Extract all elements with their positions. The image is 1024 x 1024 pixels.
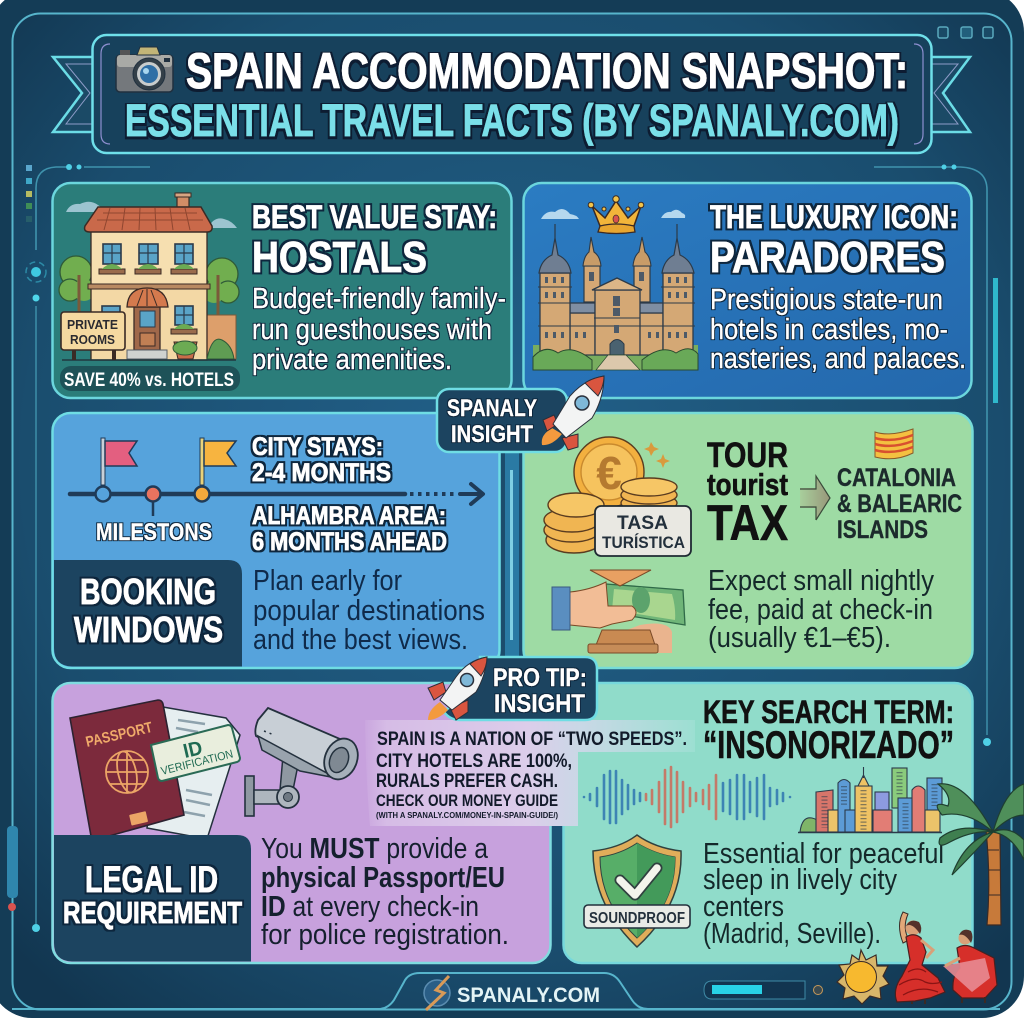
panel: legal id [52, 683, 550, 963]
text: description legal: for police registration. [261, 919, 509, 951]
divider stripe [501, 413, 523, 668]
heading: best value stay: BEST VALUE STAY: [252, 199, 497, 235]
callout: two speeds: SPAIN IS A NATION OF “TWO SPEEDS”. [377, 729, 687, 750]
panel: booking windows [52, 413, 500, 668]
icon: euro coins: € [596, 447, 622, 499]
text: search term description [703, 838, 944, 950]
icon: flamenco dancers [895, 912, 997, 1004]
text: search term description: centers [703, 891, 784, 923]
label: tasa turistica: TASA [617, 513, 668, 534]
heading: legal id requirement: REQUIREMENT [63, 895, 242, 930]
heading: legal id requirement: LEGAL ID [85, 859, 218, 900]
callout: two speeds: CHECK OUR MONEY GUIDE [376, 791, 558, 810]
heading: key search term: KEY SEARCH TERM: [703, 694, 954, 730]
text: paradores description: Prestigious state-run [710, 284, 943, 316]
sign: private rooms [61, 312, 125, 360]
sign: private rooms: ROOMS [70, 332, 115, 347]
timeline: MILESTONS [96, 519, 212, 546]
panel: paradores [524, 183, 972, 398]
icon: passport and papers [70, 700, 240, 840]
text: hostals description [252, 283, 506, 376]
icon: soundproof shield [584, 835, 690, 947]
icon: hostal building [59, 193, 239, 360]
text: paradores description [710, 284, 966, 375]
window control squares [938, 27, 993, 38]
icon: city skyline [798, 767, 942, 832]
icon: sound wave [584, 767, 790, 827]
heading: tour tourist tax: tourist [707, 467, 788, 502]
icon: sun [837, 950, 889, 1004]
text: tax description: fee, paid at check-in [708, 594, 933, 626]
badge: pro tip insight: INSIGHT [494, 690, 585, 718]
heading: tour tourist tax: TOUR [707, 436, 788, 475]
text: booking windows description [253, 565, 485, 656]
heading: tour tourist tax: TAX [707, 495, 788, 551]
panel: hostals [52, 183, 512, 398]
icon: euro coins [544, 437, 677, 553]
text: booking windows facts [252, 433, 447, 556]
text: search term description: Essential for peaceful [703, 838, 944, 870]
badge: pro tip insight [428, 657, 597, 720]
sign: private rooms: PRIVATE [67, 317, 118, 332]
heading: tour tourist tax [707, 436, 788, 551]
label: soundproof: SOUNDPROOF [589, 910, 685, 927]
heading: the luxury icon: PARADORES [710, 233, 945, 282]
icon: passport and papers: PASSPORT [84, 719, 154, 751]
text: description legal: physical Passport/EU [261, 862, 505, 894]
badge: spanaly insight: INSIGHT [451, 421, 533, 448]
text: booking windows facts: ALHAMBRA AREA: [252, 502, 446, 530]
flag: pink [96, 438, 137, 502]
text: catalonia and balearic islands: ISLANDS [837, 516, 928, 544]
panel: key search term [564, 683, 972, 963]
icon: hand paying [552, 570, 685, 653]
heading: the luxury icon [710, 199, 958, 282]
icon: spanaly logo [424, 976, 450, 1010]
icon: catalonia flag [875, 429, 913, 459]
id card: ID [181, 737, 205, 763]
text: paradores description: nasteries, and palaces. [710, 343, 966, 375]
panel: tourist tax [524, 413, 972, 668]
text: booking windows description: Plan early for [253, 565, 402, 597]
text: catalonia and balearic islands: CATALONIA [837, 464, 956, 492]
text: hostals description: run guesthouses with [252, 314, 492, 346]
heading: booking windows: BOOKING [80, 571, 216, 612]
badge: spanaly insight [437, 376, 604, 452]
title box [92, 35, 932, 153]
text: hostals description: Budget-friendly family- [252, 283, 506, 315]
id card [151, 725, 240, 781]
text: search term description: sleep in lively city [703, 864, 897, 896]
icon: rocket [428, 657, 487, 720]
badge: save 40%: SAVE 40% vs. HOTELS [64, 370, 234, 391]
icon: rocket [542, 376, 604, 450]
heading: the luxury icon: THE LUXURY ICON: [710, 199, 958, 235]
badge: spanaly insight: SPANALY [447, 395, 537, 422]
callout: two speeds: RURALS PREFER CASH. [376, 771, 558, 792]
text: description legal: ID at every check-in [261, 891, 479, 923]
heading: booking windows: WINDOWS [74, 609, 223, 650]
heading: best value stay: HOSTALS [252, 233, 427, 282]
text: tax description: (usually €1–€5). [708, 622, 891, 654]
text: booking windows facts: 2-4 MONTHS [252, 459, 391, 487]
callout: two speeds: CITY HOTELS ARE 100%, [376, 751, 572, 772]
heading: booking windows [54, 560, 242, 666]
text: booking windows description: popular destinations [253, 595, 485, 627]
side status indicators [26, 165, 46, 932]
flag: yellow [194, 438, 236, 502]
title banner [53, 35, 970, 153]
id card: VERIFICATION [160, 748, 235, 778]
icon: castle [533, 224, 698, 370]
badge: pro tip insight: PRO TIP: [493, 664, 587, 692]
icon: palm tree [937, 784, 1024, 925]
text: hostals description: private amenities. [252, 344, 452, 376]
heading: best value stay [252, 199, 497, 282]
label: tasa turistica [595, 506, 691, 556]
footer logo [12, 973, 1000, 1010]
text: catalonia and balearic islands [837, 464, 962, 544]
heading: legal id requirement [54, 835, 251, 962]
text: description legal [261, 833, 509, 951]
text: description legal: You MUST provide a [261, 833, 489, 865]
icon: camera [116, 47, 173, 92]
text: tax description [708, 565, 934, 654]
callout: two speeds: (WITH A SPANALY.COM/MONEY-IN-SPAIN-GUIDE/) [376, 810, 558, 820]
icon: crown [588, 196, 644, 234]
ribbon tails [53, 57, 970, 132]
text: catalonia and balearic islands: & BALEARIC [837, 490, 962, 518]
text: booking windows facts: CITY STAYS: [252, 433, 383, 461]
arrow [800, 476, 830, 520]
text: booking windows facts: 6 MONTHS AHEAD [252, 528, 447, 556]
icon: security camera [245, 708, 364, 816]
heading: key search term [703, 694, 954, 767]
label: tasa turistica: TURÍSTICA [602, 533, 685, 552]
icon: clouds [541, 209, 685, 219]
footer logo: SPANALY.COM [457, 984, 600, 1007]
text: booking windows description: and the best views. [253, 624, 468, 656]
text: search term description: (Madrid, Seville). [703, 918, 881, 950]
callout: two speeds [365, 720, 695, 826]
timeline [70, 438, 483, 546]
footer progress bar [704, 981, 822, 999]
text: paradores description: hotels in castles, mo- [710, 314, 948, 346]
text: tax description: Expect small nightly [708, 565, 934, 597]
